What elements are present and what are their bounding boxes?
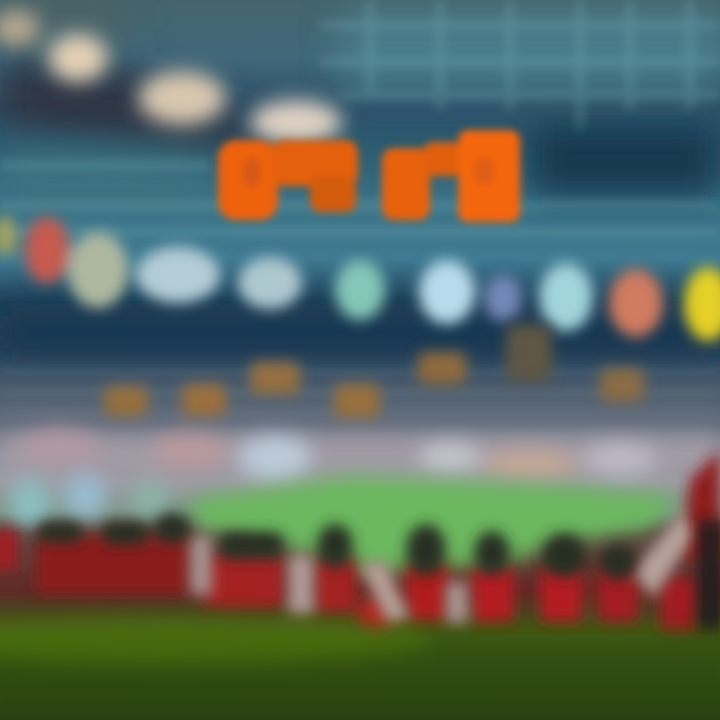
roof lattice — [0, 0, 720, 232]
roof lights — [0, 10, 342, 144]
bright green pitch — [190, 476, 680, 572]
roof shadow and structure — [0, 0, 720, 350]
row of players in red — [0, 450, 720, 633]
dark player silhouettes — [38, 513, 720, 632]
row of coloured balloons and flags — [0, 216, 720, 341]
crowd in the stands — [0, 427, 720, 527]
foreground grass — [0, 618, 720, 720]
stand striations — [0, 372, 720, 412]
orange scoreboard sign — [218, 130, 520, 222]
amber seating lights — [104, 324, 644, 418]
white kit stripes between players — [190, 512, 694, 624]
